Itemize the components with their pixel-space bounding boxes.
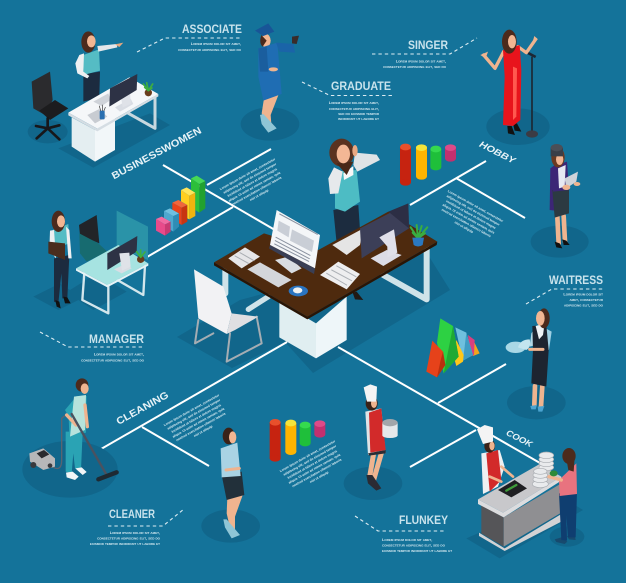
counter: [478, 464, 561, 551]
text block: cleaning: [163, 393, 232, 448]
figure: flunkey: [344, 384, 402, 500]
black office chair: [32, 72, 68, 139]
customer woman: [549, 448, 577, 544]
triangle chart: [426, 318, 480, 377]
label: graduate: sed do eiusmod tempor: [338, 111, 380, 116]
text block: businesswomen: [219, 157, 288, 212]
green cylinder: [430, 146, 441, 170]
manager shadow: [33, 273, 127, 310]
yellow prism: [454, 340, 464, 366]
counter shadow: [466, 497, 584, 558]
text block: businesswomen: Lorem ipsum dolor sit amet, consectetur: [219, 157, 277, 191]
text block: hobby: adipiscing elit, sed do eiusmod tempor: [446, 194, 501, 227]
figure: associate at desk: [28, 31, 170, 168]
vacuum cleaner: [29, 412, 70, 470]
category label: businesswomen: BUSINESSWOMEN: [110, 125, 204, 182]
text block: cook: Lorem ipsum dolor sit amet, consectetur: [279, 439, 337, 473]
central desk scene: [194, 139, 437, 362]
text block: businesswomen: adipiscing elit, sed do eiusmod tempor: [223, 162, 278, 195]
potted plant: [411, 225, 427, 246]
category label: cook: COOK: [505, 428, 535, 450]
white chair: [194, 269, 262, 362]
figure: woman in blue shirt: [201, 428, 260, 543]
pedestal: [279, 297, 347, 358]
desk legs: [225, 248, 427, 309]
text block: cook: [279, 439, 348, 494]
label: graduate: Lorem ipsum dolor sit amet,: [329, 100, 379, 105]
front monitor: [269, 210, 320, 274]
text block: hobby: [435, 189, 505, 244]
pink bar: [156, 217, 171, 236]
pink cylinder: [314, 420, 325, 438]
text block: cleaning: nisi ut aliquip: [193, 424, 213, 438]
singer: [480, 30, 538, 135]
papers right: [320, 262, 360, 289]
text block: hobby: incididunt ut labore et dolore magna: [445, 199, 497, 230]
text block: cleaning: Lorem ipsum dolor sit amet, consectetur: [163, 393, 221, 427]
label: waitress: adipiscing elit, sed do: [564, 302, 604, 308]
papers left: [228, 247, 260, 268]
label: associate: [137, 22, 242, 52]
bar chart: 3D bars: [156, 176, 205, 236]
woman behind desk: [328, 139, 380, 300]
text block: cook: aliqua. Ut enim ad minim veniam, quis: [288, 453, 341, 485]
shadow: [531, 226, 589, 258]
cylinder chart: upper right: [400, 144, 456, 186]
red cylinder: [400, 144, 411, 186]
label: cleaner: [90, 507, 184, 546]
flunkey shadow: [344, 467, 402, 500]
yellow cylinder: [416, 144, 427, 180]
text block: cleaning: incididunt ut labore et dolore magna: [171, 403, 222, 434]
label: manager: Lorem ipsum dolor sit amet,: [94, 352, 144, 356]
red bar: [172, 200, 187, 225]
waitress shadow: [507, 386, 566, 419]
woman shadow: [201, 509, 260, 543]
blue bar: [164, 208, 179, 232]
text block: businesswomen: incididunt ut labore et dolore magna: [227, 167, 278, 198]
rear monitor: [360, 203, 409, 266]
flunkey: [364, 384, 398, 491]
associate woman: [75, 31, 123, 102]
label: graduate: incididunt ut labore et: [338, 116, 379, 121]
text block: hobby: nostrud exercitation ullamco laboris: [441, 208, 492, 238]
figure: cook counter and customer: [466, 425, 584, 558]
text block: hobby: aliqua. Ut enim ad minim veniam, quis: [442, 203, 495, 235]
stacked plates: [532, 452, 554, 488]
desk and chair shadow: [28, 113, 170, 168]
text block: cook: nostrud exercitation ullamco laboris: [291, 458, 342, 488]
text block: hobby: nisi ut aliquip: [454, 220, 474, 234]
label: cleaner: eiusmod tempor incididunt ut labore et: [90, 541, 160, 546]
text block: cook: nisi ut aliquip: [309, 470, 329, 484]
text block: hobby: Lorem ipsum dolor sit amet, consectetur: [447, 189, 505, 223]
red cylinder: [270, 419, 281, 462]
label: waitress: WAITRESS: [549, 273, 603, 287]
label: associate: Lorem ipsum dolor sit amet,: [191, 41, 241, 46]
graduate shadow: [241, 107, 299, 141]
text block: cook: adipiscing elit, sed do eiusmod tempor: [283, 444, 338, 477]
connector lines: [82, 149, 540, 467]
label: cleaner: consectetur adipiscing elit, sed do: [97, 536, 161, 540]
figure: graduate: [241, 23, 299, 141]
label: flunkey: FLUNKEY: [399, 513, 448, 527]
text block: cleaning: aliqua. Ut enim ad minim veniam, quis: [172, 407, 225, 439]
category label: hobby: HOBBY: [478, 139, 518, 166]
cleaner shadow: [22, 441, 118, 498]
label: cleaner: CLEANER: [109, 507, 155, 521]
pink prism: [468, 335, 475, 357]
label: graduate: [302, 79, 392, 121]
label: waitress: amet, consectetur: [570, 297, 604, 302]
cylinder chart: lower middle: [270, 419, 325, 462]
label: graduate: consectetur adipiscing elit,: [329, 106, 379, 111]
graduate: [255, 23, 299, 133]
chair: [79, 215, 107, 262]
text block: cook: incididunt ut labore et dolore magna: [287, 449, 338, 480]
figure: singer: [480, 30, 550, 145]
label: graduate: GRADUATE: [331, 79, 391, 93]
label: waitress: Lorem ipsum dolor sit: [563, 292, 603, 296]
label: cleaner: Lorem ipsum dolor sit amet,: [110, 530, 160, 535]
keyboard: [247, 262, 292, 287]
green cylinder: [300, 422, 311, 446]
pink cylinder: [445, 144, 456, 162]
manager woman: [48, 211, 72, 308]
floor shadow: central desk: [177, 250, 450, 373]
blue prism: [455, 327, 473, 361]
label: singer: [372, 38, 477, 69]
label: waitress: [526, 273, 604, 308]
label: flunkey: Lorem ipsum dolor sit amet,: [382, 537, 432, 542]
desktop: [214, 212, 437, 319]
mouse pad: [289, 286, 308, 296]
label: singer: Lorem ipsum dolor sit amet,: [396, 58, 446, 64]
label: manager: [40, 332, 145, 362]
back keyboard: [332, 228, 363, 255]
label: flunkey: [355, 513, 452, 553]
label: singer: SINGER: [408, 38, 448, 52]
text block: cleaning: nostrud exercitation ullamco laboris: [175, 412, 226, 442]
partition: [117, 211, 148, 260]
microphone stand: [526, 52, 538, 138]
yellow bar: [181, 187, 195, 219]
figure: cleaner with vacuum: [22, 378, 118, 498]
label: manager: consectetur adipiscing elit, sed do: [81, 358, 145, 362]
text block: businesswomen: nostrud exercitation ullamco laboris: [231, 176, 282, 206]
label: flunkey: eiusmod tempor incididunt ut labore et: [382, 548, 452, 553]
green bar: [191, 176, 205, 213]
woman: [221, 428, 244, 538]
cook: [477, 425, 513, 494]
woman with cards: [550, 144, 580, 248]
label: associate: consectetur adipiscing elit, sed do: [178, 47, 242, 52]
figure: woman with cards: [531, 144, 589, 258]
label: flunkey: consectetur adipiscing elit, sed do: [382, 542, 446, 548]
text block: businesswomen: aliqua. Ut enim ad minim veniam, quis: [228, 171, 281, 203]
small orange prism: [473, 342, 480, 356]
green prism: [437, 318, 459, 373]
label: singer: consectetur adipiscing elit, sed do: [383, 64, 447, 69]
figure: waitress with tray: [506, 308, 566, 419]
text block: cleaning: adipiscing elit, sed do eiusmod tempor: [167, 398, 222, 431]
category label: cleaning: CLEANING: [115, 390, 171, 428]
glass desk: [76, 236, 148, 313]
waitress: [506, 308, 552, 412]
singer shadow: [486, 108, 550, 145]
red prism: [426, 341, 445, 377]
white desk: [68, 74, 158, 162]
cleaner woman: [65, 378, 117, 480]
text block: businesswomen: nisi ut aliquip: [249, 188, 269, 202]
yellow cylinder: [285, 420, 296, 455]
figure: manager at glass desk: [33, 211, 148, 313]
label: associate: ASSOCIATE: [182, 22, 242, 36]
label: manager: MANAGER: [89, 332, 144, 346]
